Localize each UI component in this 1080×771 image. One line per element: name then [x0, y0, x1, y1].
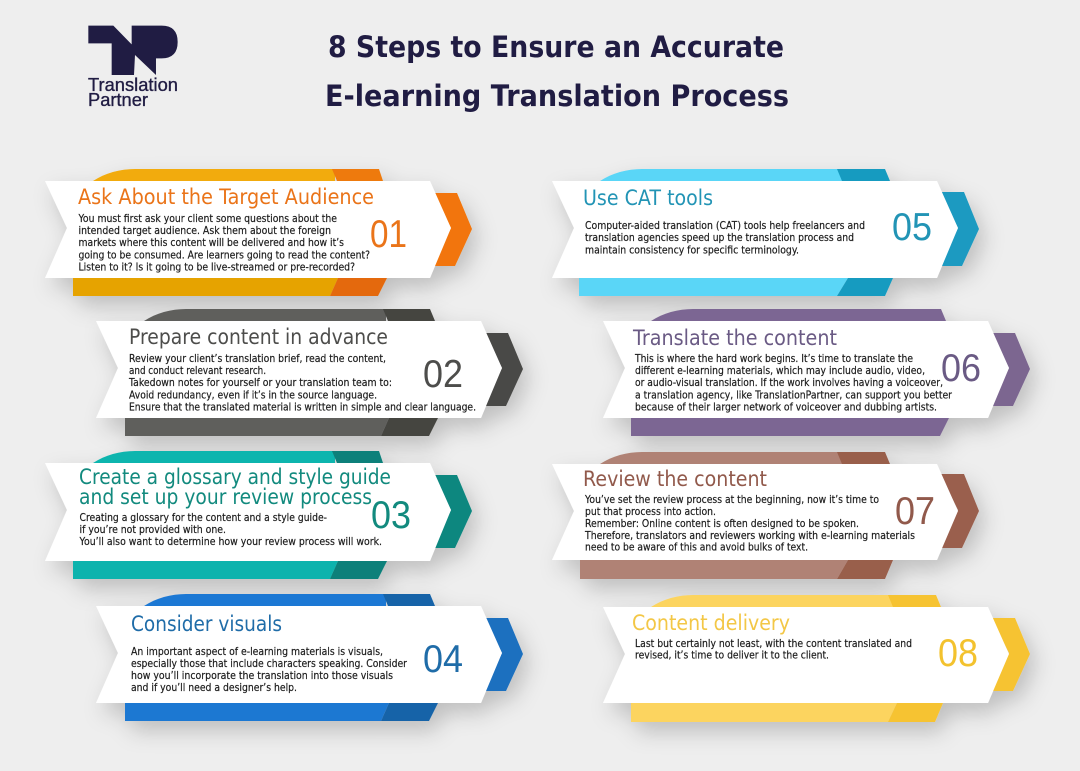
- panel: step 07: Therefore, translators and reviewers working with e-learning materials: [584, 529, 915, 542]
- panel: step 07: Review the content: [583, 467, 767, 492]
- panel: step 04: Consider visuals: [131, 612, 282, 637]
- panel: step 02: Takedown notes for yourself or your translation team to:: [128, 376, 392, 389]
- panel: step 05: 05: [892, 206, 932, 249]
- panel: step 03: 03: [371, 494, 411, 537]
- panel: step 08: revised, it’s time to deliver it to the client.: [635, 648, 829, 662]
- panel: step 08: 08: [938, 632, 978, 675]
- panel: step 04: 04: [423, 638, 463, 681]
- panel: step 01: markets where this content will be delivered and how it’s: [78, 236, 344, 249]
- title: [325, 30, 789, 113]
- panel: step 06: [603, 309, 1030, 436]
- panel: step 05: translation agencies speed up the translation process and: [585, 231, 854, 244]
- panel: step 01: 01: [370, 213, 407, 256]
- panel: step 05: Computer-aided translation (CAT) tools help freelancers and: [585, 219, 865, 232]
- panel: step 02: Avoid redundancy, even if it’s in the source language.: [129, 388, 377, 402]
- panel: step 03: You’ll also want to determine how your review process will work.: [79, 535, 382, 548]
- panel: step 03: Creating a glossary for the content and a style guide-: [80, 511, 327, 524]
- panel: step 04: especially those that include characters speaking. Consider: [131, 657, 407, 670]
- panel: step 06: This is where the hard work begins. It’s time to translate the: [634, 352, 913, 365]
- panel: step 02: Ensure that the translated material is written in simple and clear language.: [129, 400, 476, 414]
- panel: step 02: and conduct relevant research.: [129, 364, 266, 377]
- panel: step 01: intended target audience. Ask them about the foreign: [78, 224, 331, 237]
- panel: step 04: and if you’ll need a designer’s help.: [131, 681, 297, 694]
- logo: Translation Partner: Translation: [88, 74, 178, 95]
- panel: step 01: going to be consumed. Are learners going to read the content?: [78, 248, 370, 262]
- title: 8 Steps to Ensure an Accurate: [328, 30, 784, 64]
- panel: step 06: because of their larger network of voiceover and dubbing artists.: [635, 400, 937, 414]
- panel: step 03: [45, 451, 472, 579]
- panel: step 03: and set up your review process: [79, 485, 372, 510]
- panel: step 05: [552, 169, 979, 296]
- panel: step 01: You must first ask your client some questions about the: [78, 212, 337, 225]
- panel: step 06: different e-learning materials, which may include audio, video,: [635, 364, 925, 377]
- panel: step 06: 06: [941, 347, 981, 390]
- panel: step 07: put that process into action.: [585, 505, 716, 518]
- panel: step 06: or audio-visual translation. If the work involves having a voiceover,: [635, 376, 943, 389]
- panel: step 02: Prepare content in advance: [129, 325, 388, 350]
- logo: Translation Partner: [88, 26, 178, 110]
- panel: step 07: Remember: Online content is often designed to be spoken.: [585, 517, 859, 530]
- panel: step 08: Last but certainly not least, with the content translated and: [635, 637, 912, 650]
- panel: step 04: [96, 594, 523, 721]
- panel: step 02: [96, 309, 523, 436]
- panel: step 01: [45, 169, 472, 296]
- panel: step 07: need to be aware of this and avoid bulks of text.: [585, 540, 808, 554]
- title: E-learning Translation Process: [325, 79, 789, 113]
- panel: step 02: Review your client’s translation brief, read the content,: [129, 352, 386, 365]
- panel: step 05: maintain consistency for specific terminology.: [585, 244, 799, 256]
- panel: step 08: [603, 595, 1030, 722]
- panel: step 08: Content delivery: [632, 611, 790, 636]
- panel: step 04: how you’ll incorporate the translation into those visuals: [131, 669, 393, 682]
- panel: step 05: Use CAT tools: [583, 186, 713, 211]
- panel: step 01: Listen to it? Is it going to be live-streamed or pre-recorded?: [78, 260, 355, 274]
- panel: step 07: [552, 452, 979, 579]
- panel: step 04: An important aspect of e-learning materials is visuals,: [131, 645, 383, 658]
- logo: Translation Partner: Partner: [88, 89, 148, 110]
- panel: step 03: Create a glossary and style guide: [79, 465, 391, 490]
- panel: step 03: if you’re not provided with one.: [80, 523, 226, 536]
- panel: step 01: Ask About the Target Audience: [78, 185, 374, 210]
- panel: step 06: Translate the content: [632, 326, 837, 351]
- panel: step 07: You’ve set the review process at the beginning, now it’s time to: [584, 493, 879, 506]
- panel: step 07: 07: [895, 490, 935, 533]
- panel: step 02: 02: [423, 353, 463, 396]
- panel: step 06: a translation agency, like TranslationPartner, can support you better: [635, 388, 952, 402]
